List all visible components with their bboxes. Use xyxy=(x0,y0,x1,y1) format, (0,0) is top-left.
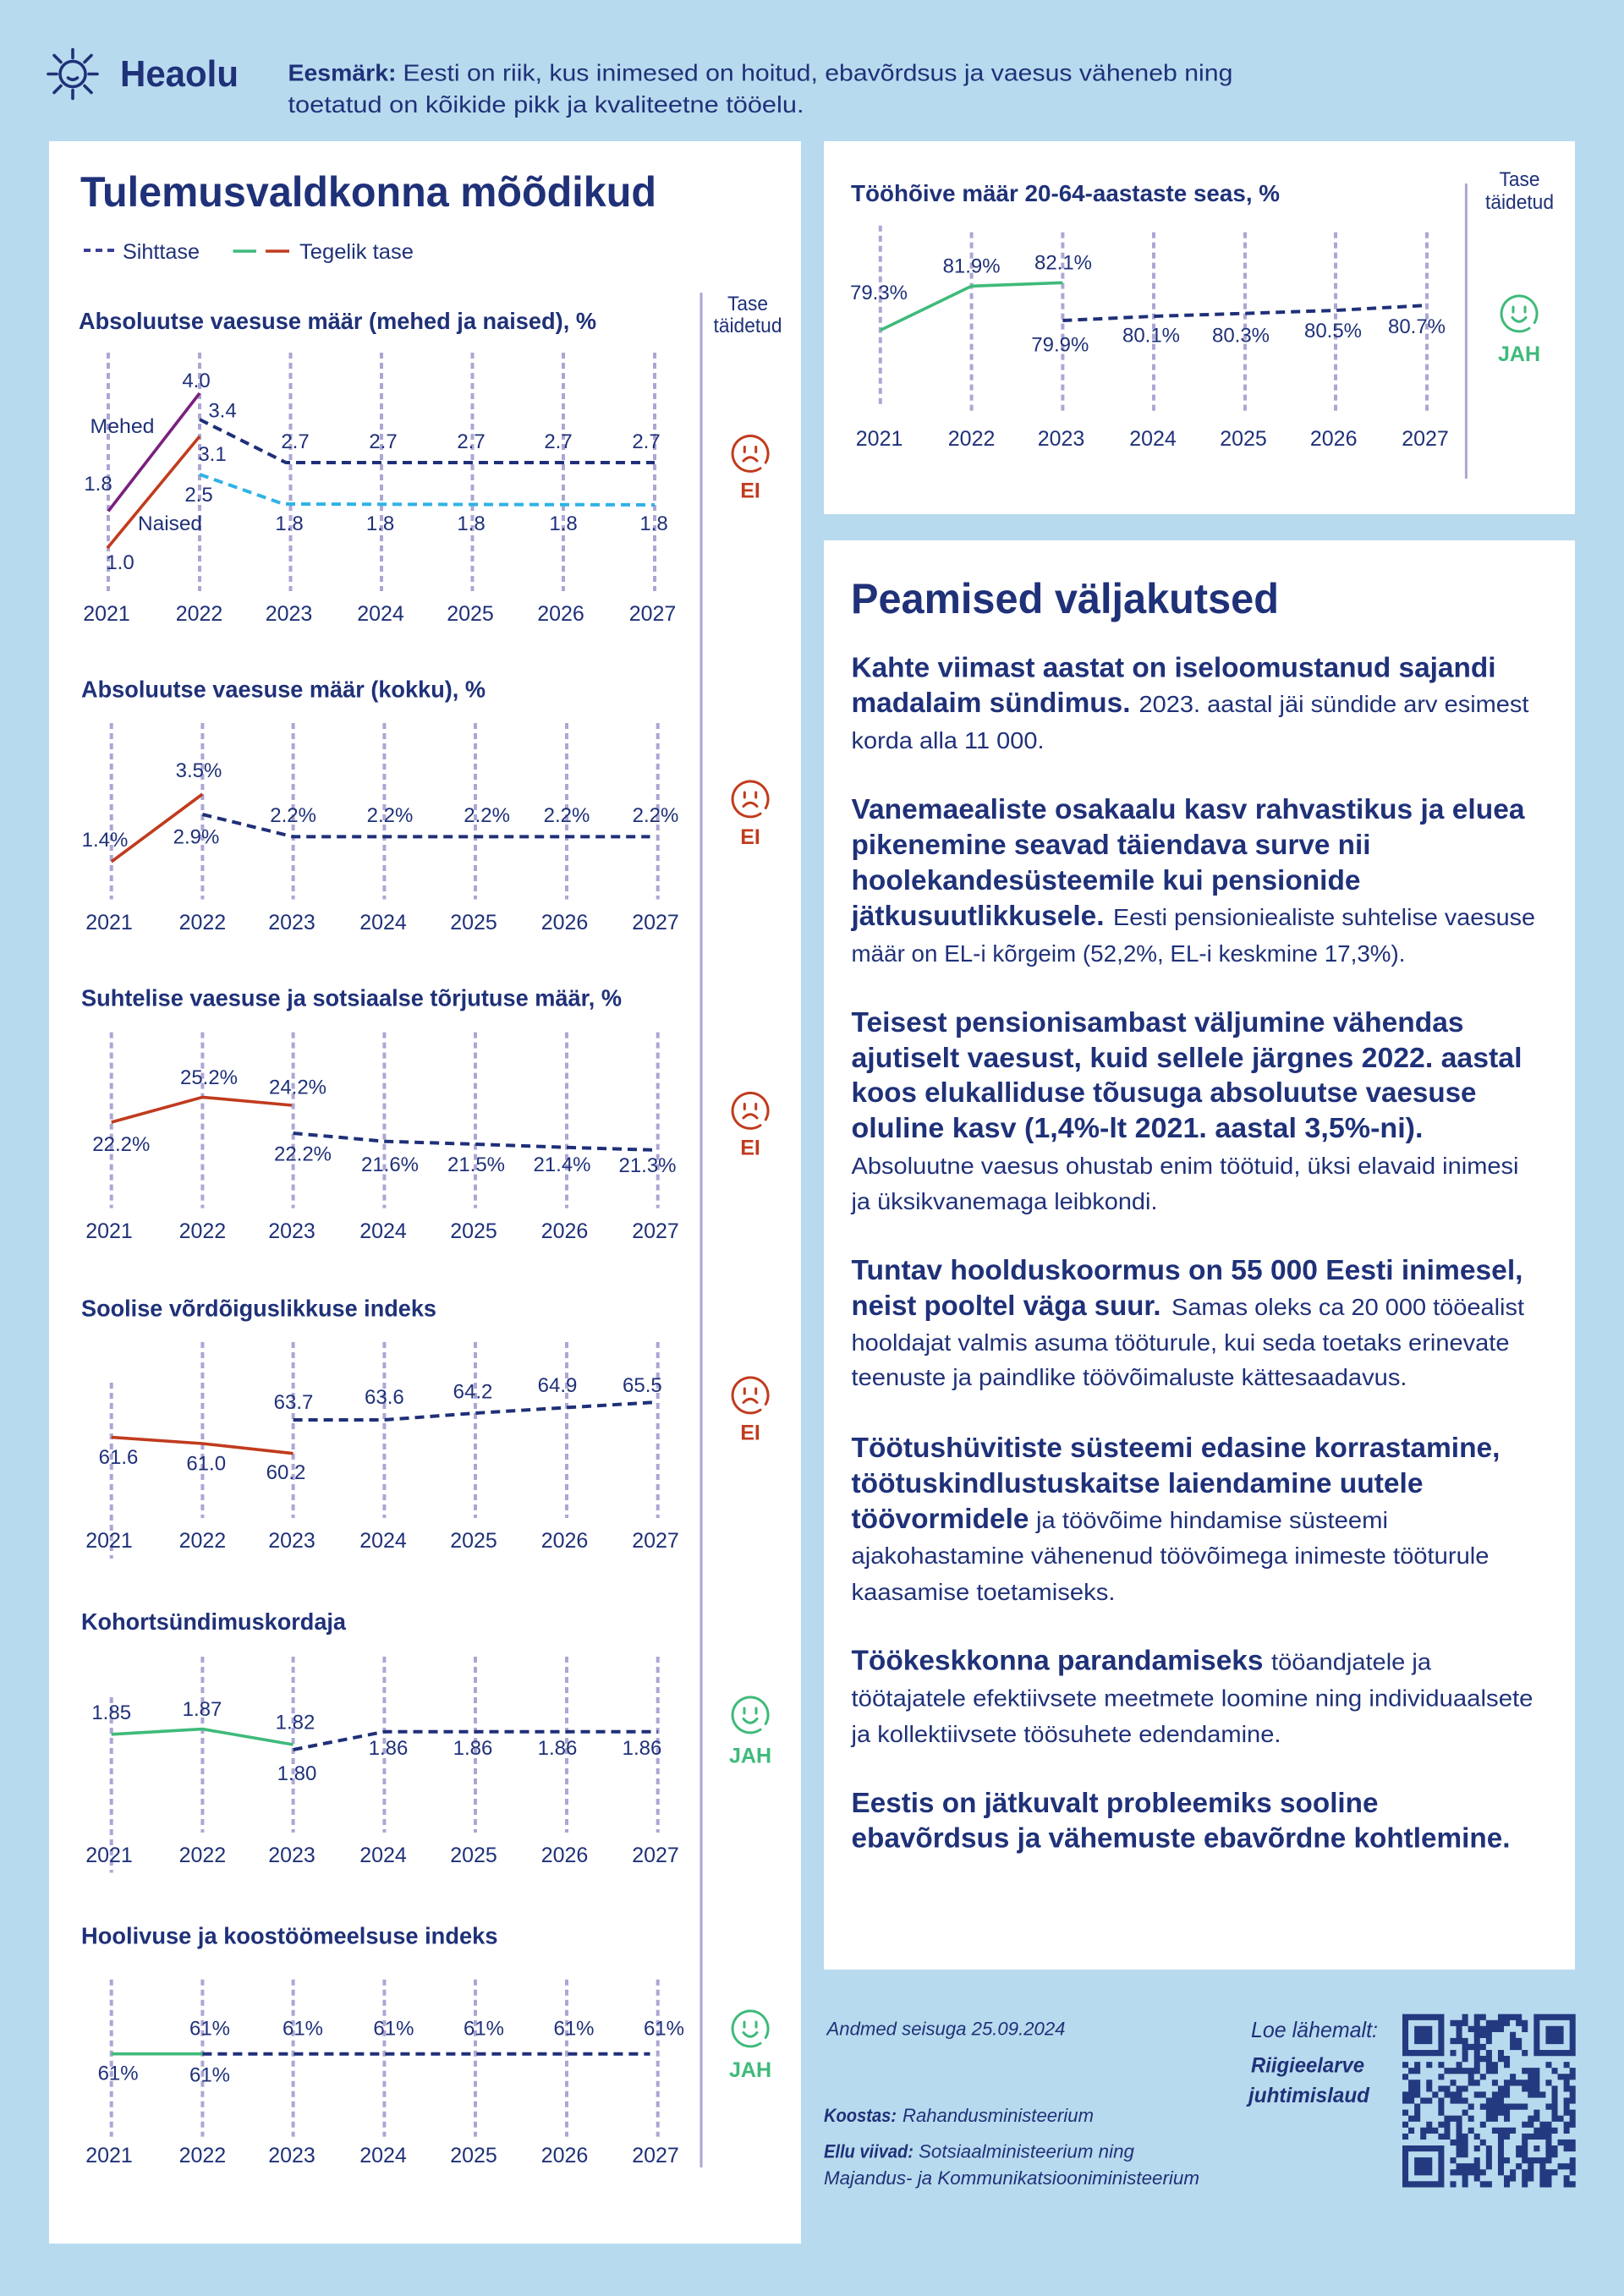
value labels xyxy=(92,1066,677,1177)
text block: care burden: Tuntav hoolduskoormus on 55 000 Eesti inimesel, xyxy=(851,1254,1522,1285)
value labels: 21.3% xyxy=(618,1154,677,1177)
text block: pension pillar: ja üksikvanemaga leibkondi. xyxy=(850,1188,1157,1214)
value labels: 79.9% xyxy=(1031,333,1089,356)
chart title: Absoluutse vaesuse määr (kokku), % xyxy=(81,677,486,703)
line: men actual xyxy=(108,393,200,511)
value labels: 1.4% xyxy=(82,829,128,852)
goal text: Eesmärk: xyxy=(288,59,396,86)
year axis: 2026 xyxy=(541,911,588,934)
year axis: 2021 xyxy=(856,427,903,451)
status column heading: täidetud xyxy=(1485,191,1554,214)
value labels: 61.0 xyxy=(186,1453,226,1476)
year axis: 2021 xyxy=(83,602,130,626)
line: target xyxy=(294,1402,658,1420)
text block: ageing xyxy=(850,793,1535,967)
year axis: 2025 xyxy=(450,1844,497,1867)
text block: birth rate: korda alla 11 000. xyxy=(851,727,1044,753)
chart title: Hoolivuse ja koostöömeelsuse indeks xyxy=(81,1923,497,1949)
year axis: 2026 xyxy=(541,2144,588,2167)
credits xyxy=(824,2105,1199,2189)
text block: work environment: töötajatele efektiivsete meetmete loomine ning individuaalsete xyxy=(851,1685,1533,1712)
year axis: 2027 xyxy=(632,2144,679,2167)
line: target xyxy=(294,1133,658,1150)
value labels: 2.7 xyxy=(632,430,661,453)
status: JAH xyxy=(1498,296,1540,366)
credits: Ellu viivad: xyxy=(824,2141,914,2162)
value labels: 22.2% xyxy=(92,1133,150,1156)
value labels: 2.7 xyxy=(457,430,486,453)
year axis: 2025 xyxy=(1220,427,1267,451)
text block: work environment: Töökeskkonna parandamiseks xyxy=(851,1644,1264,1676)
text block: care burden: hooldajat valmis asuma tööturule, kui seda toetaks erinevate xyxy=(851,1329,1509,1356)
goal text: toetatud on kõikide pikk ja kvaliteetne tööelu. xyxy=(288,91,804,118)
value labels: 61.6 xyxy=(99,1446,138,1469)
year axis: 2023 xyxy=(268,1219,315,1243)
chart title: Soolise võrdõiguslikkuse indeks xyxy=(81,1296,436,1321)
text block: inequality xyxy=(851,1787,1511,1854)
value labels: 61% xyxy=(464,2018,504,2041)
year axis: 2026 xyxy=(541,1529,588,1553)
chart: cohort fertility rate xyxy=(81,1608,771,1872)
goal text: Eesti on riik, kus inimesed on hoitud, ebavõrdsus ja vaesus väheneb ning xyxy=(403,59,1232,86)
text block: ageing: jätkusuutlikkusele. xyxy=(850,900,1105,931)
status: EI xyxy=(732,436,768,502)
text block: pension pillar: oluline kasv (1,4%-lt 2021. aastal 3,5%-ni). xyxy=(851,1112,1423,1143)
value labels: 3.4 xyxy=(208,399,237,423)
line: target xyxy=(1062,305,1427,321)
status: EI xyxy=(732,1378,768,1445)
value labels: 1.82 xyxy=(276,1712,315,1734)
goal text xyxy=(288,59,1232,118)
status: JAH xyxy=(729,2011,771,2082)
value labels: 61% xyxy=(283,2018,323,2041)
year axis: 2024 xyxy=(359,1219,407,1243)
chart title: Kohortsündimuskordaja xyxy=(81,1608,346,1635)
value labels: 2.2% xyxy=(464,804,510,827)
text block: care burden: Samas oleks ca 20 000 tööealist xyxy=(1171,1294,1524,1320)
year axis xyxy=(856,427,1449,451)
chart title: Absoluutse vaesuse määr (mehed ja naised), % xyxy=(79,308,596,334)
text block: pension pillar: koos elukalliduse tõusuga absoluutse vaesuse xyxy=(851,1077,1477,1108)
text block: inequality: ebavõrdsus ja vähemuste ebavõrdne kohtlemine. xyxy=(851,1822,1511,1854)
year axis: 2022 xyxy=(948,427,995,451)
data date: Andmed seisuga 25.09.2024 xyxy=(825,2019,1066,2040)
value labels: 1.86 xyxy=(623,1737,661,1760)
year axis xyxy=(85,911,679,934)
value labels: Mehed xyxy=(90,415,154,438)
value labels: 1.87 xyxy=(183,1698,222,1721)
value labels xyxy=(98,2018,684,2087)
year axis: 2027 xyxy=(1402,427,1449,451)
value labels: 1.85 xyxy=(91,1701,131,1724)
value labels: 61% xyxy=(373,2018,414,2041)
header xyxy=(48,49,1232,118)
legend xyxy=(84,240,414,264)
value labels: 79.3% xyxy=(850,282,908,304)
year axis: 2026 xyxy=(541,1844,588,1867)
value labels: 80.1% xyxy=(1122,325,1180,347)
year axis: 2024 xyxy=(359,2144,407,2167)
value labels: 61% xyxy=(553,2018,595,2041)
line: target xyxy=(294,1732,658,1750)
value labels: 22.2% xyxy=(274,1143,332,1165)
value labels: 1.8 xyxy=(275,512,304,535)
text block: unemployment benefits: ja töövõime hindamise süsteemi xyxy=(1035,1507,1388,1533)
text block: pension pillar: Absoluutne vaesus ohustab enim töötuid, üksi elavaid inimesi xyxy=(851,1153,1519,1179)
year axis: 2024 xyxy=(359,1844,407,1867)
year axis: 2023 xyxy=(268,2144,315,2167)
value labels: 2.2% xyxy=(367,804,413,827)
year axis: 2027 xyxy=(632,1219,679,1243)
year axis: 2023 xyxy=(1038,427,1084,451)
text block: ageing: pikenemine seavad täiendava surve nii xyxy=(851,829,1370,860)
year axis xyxy=(85,1844,679,1867)
status: JAH: JAH xyxy=(729,1744,771,1767)
year axis: 2027 xyxy=(632,1529,679,1553)
value labels: 2.7 xyxy=(369,430,398,453)
text block: pension pillar xyxy=(850,1006,1522,1214)
year axis xyxy=(83,602,676,626)
status: JAH: JAH xyxy=(1498,342,1540,366)
text block: pension pillar: ajutiselt vaesust, kuid sellele järgnes 2022. aastal xyxy=(851,1042,1522,1073)
text block: work environment xyxy=(850,1644,1533,1747)
line: actual xyxy=(112,1097,292,1122)
status: EI: EI xyxy=(740,1422,760,1445)
year axis: 2022 xyxy=(179,1844,226,1867)
status column heading: Tase xyxy=(1499,168,1539,191)
footer xyxy=(824,2017,1576,2189)
status: JAH xyxy=(729,1697,771,1767)
panel: employment rate chart xyxy=(824,141,1575,514)
value labels: 61% xyxy=(644,2018,684,2041)
text block: unemployment benefits: töövormidele xyxy=(851,1503,1029,1534)
text block: unemployment benefits: töötuskindlustuskaitse laiendamine uutele xyxy=(851,1467,1423,1499)
year axis: 2023 xyxy=(268,911,315,934)
text block: unemployment benefits: kaasamise toetamiseks. xyxy=(851,1579,1115,1605)
heading: Peamised väljakutsed: Peamised väljakutsed xyxy=(851,575,1279,622)
text block: ageing: hoolekandesüsteemile kui pensionide xyxy=(851,864,1360,896)
value labels: 3.5% xyxy=(176,759,222,782)
value labels: 4.0 xyxy=(182,370,211,392)
legend: Tegelik tase xyxy=(299,240,414,264)
text block: birth rate xyxy=(851,652,1529,753)
line: actual xyxy=(112,1729,294,1745)
year axis: 2021 xyxy=(85,1844,133,1867)
year axis: 2024 xyxy=(357,602,404,626)
year axis: 2023 xyxy=(266,602,312,626)
value labels: 1.86 xyxy=(538,1737,577,1760)
read more: Riigieelarve xyxy=(1251,2054,1364,2078)
line: actual xyxy=(881,282,1062,330)
value labels xyxy=(84,370,668,574)
value labels: 65.5 xyxy=(623,1374,662,1397)
line: men target xyxy=(200,419,655,463)
chart: care and cooperation index xyxy=(81,1923,771,2167)
QR code xyxy=(1402,2017,1576,2184)
year axis: 2027 xyxy=(632,911,679,934)
year axis: 2025 xyxy=(447,602,494,626)
value labels: 64.9 xyxy=(538,1374,577,1397)
year axis: 2026 xyxy=(1310,427,1358,451)
chart title: Suhtelise vaesuse ja sotsiaalse tõrjutuse määr, % xyxy=(81,984,622,1011)
value labels: 2.7 xyxy=(544,430,573,453)
text block: birth rate: 2023. aastal jäi sündide arv esimest xyxy=(1138,691,1529,717)
text block: birth rate: Kahte viimast aastat on iseloomustanud sajandi xyxy=(851,652,1495,683)
year axis: 2021 xyxy=(85,911,133,934)
year axis: 2021 xyxy=(85,2144,133,2167)
heading: Heaolu: Heaolu xyxy=(120,53,239,95)
value labels: 25.2% xyxy=(180,1066,238,1089)
text block: work environment: ja kollektiivsete töösuhete edendamine. xyxy=(850,1721,1281,1747)
value labels: 24.2% xyxy=(269,1076,326,1099)
line: actual xyxy=(112,794,202,862)
year axis: 2027 xyxy=(632,1844,679,1867)
value labels: 81.9% xyxy=(943,255,1001,277)
status: EI: EI xyxy=(740,825,760,849)
text block: ageing: määr on EL-i kõrgeim (52,2%, EL-i keskmine 17,3%). xyxy=(851,940,1406,967)
value labels: 63.6 xyxy=(365,1386,404,1409)
value labels: 1.8 xyxy=(457,512,486,535)
year axis xyxy=(85,1529,679,1553)
year axis: 2022 xyxy=(179,1219,226,1243)
text block: unemployment benefits: ajakohastamine vähenenud töövõimega inimeste tööturule xyxy=(851,1543,1489,1569)
chart: relative poverty and social exclusion xyxy=(81,984,768,1243)
year axis: 2024 xyxy=(359,1529,407,1553)
value labels xyxy=(82,759,678,852)
status: EI xyxy=(732,781,768,849)
status: EI: EI xyxy=(740,479,760,502)
line: target xyxy=(202,2052,650,2056)
year axis: 2022 xyxy=(179,2144,226,2167)
line: women target xyxy=(200,474,655,505)
text block: care burden xyxy=(851,1254,1524,1390)
value labels: 63.7 xyxy=(274,1391,313,1414)
status column heading: täidetud xyxy=(714,315,782,337)
value labels: 1.8 xyxy=(84,473,112,496)
credits: Sotsiaalministeerium ning xyxy=(919,2141,1135,2162)
year axis: 2024 xyxy=(359,911,407,934)
chart: absolute poverty total xyxy=(81,677,768,934)
value labels: 1.86 xyxy=(453,1737,492,1760)
value labels: 80.3% xyxy=(1212,325,1270,347)
year axis: 2025 xyxy=(450,2144,497,2167)
value labels: 1.0 xyxy=(106,551,134,574)
year axis: 2021 xyxy=(85,1529,133,1553)
credits: Koostas: xyxy=(824,2105,897,2126)
read more: juhtimislaud xyxy=(1246,2084,1370,2107)
year axis: 2022 xyxy=(176,602,222,626)
year axis: 2026 xyxy=(541,1219,588,1243)
chart: absolute poverty men and women xyxy=(79,308,768,626)
year axis: 2022 xyxy=(179,1529,226,1553)
value labels: 3.1 xyxy=(198,443,227,466)
value labels: 1.86 xyxy=(369,1737,408,1760)
year axis: 2025 xyxy=(450,1529,497,1553)
value labels: 2.9% xyxy=(173,825,219,848)
year axis: 2023 xyxy=(268,1529,315,1553)
legend: Sihttase xyxy=(123,240,200,264)
year axis xyxy=(85,2144,679,2167)
status column heading: Tase xyxy=(727,293,768,315)
credits: Rahandusministeerium xyxy=(903,2105,1094,2126)
value labels: 61% xyxy=(98,2062,139,2085)
read more: Loe lähemalt: xyxy=(1251,2017,1378,2042)
value labels: 80.5% xyxy=(1304,320,1362,342)
status column heading xyxy=(714,293,782,337)
value labels: 82.1% xyxy=(1034,251,1092,274)
value labels: 21.4% xyxy=(533,1153,591,1176)
year axis: 2022 xyxy=(179,911,226,934)
value labels: 1.8 xyxy=(639,512,668,535)
chart title: Tööhõive määr 20-64-aastaste seas, % xyxy=(851,180,1280,206)
year axis: 2025 xyxy=(450,1219,497,1243)
value labels: 1.8 xyxy=(549,512,578,535)
text block: unemployment benefits xyxy=(851,1432,1501,1605)
value labels: 1.80 xyxy=(277,1762,316,1785)
value labels: 80.7% xyxy=(1388,315,1446,338)
value labels: Naised xyxy=(138,512,202,535)
value labels: 21.5% xyxy=(447,1153,505,1176)
value labels xyxy=(99,1374,662,1484)
value labels: 60.2 xyxy=(266,1461,305,1484)
text block: birth rate: madalaim sündimus. xyxy=(851,687,1130,718)
year axis: 2024 xyxy=(1129,427,1177,451)
line: actual xyxy=(112,2052,202,2055)
value labels xyxy=(91,1698,661,1785)
credits: Majandus- ja Kommunikatsiooniministeerium xyxy=(824,2167,1199,2189)
text block: ageing: Vanemaealiste osakaalu kasv rahvastikus ja eluea xyxy=(851,793,1525,825)
value labels: 21.6% xyxy=(361,1153,419,1176)
status: EI: EI xyxy=(740,1137,760,1160)
panel: main challenges xyxy=(824,540,1575,1970)
chart: gender equality index xyxy=(81,1296,768,1559)
text block: work environment: tööandjatele ja xyxy=(1271,1649,1431,1674)
status: JAH: JAH xyxy=(729,2058,771,2082)
text block: pension pillar: Teisest pensionisambast väljumine vähendas xyxy=(851,1006,1463,1038)
year axis: 2023 xyxy=(268,1844,315,1867)
text block: unemployment benefits: Töötushüvitiste süsteemi edasine korrastamine, xyxy=(851,1432,1501,1463)
year axis: 2026 xyxy=(537,602,584,626)
status: EI xyxy=(732,1093,768,1160)
text block: care burden: teenuste ja paindlike töövõimaluste kättesaadavus. xyxy=(851,1364,1407,1390)
text block: ageing: Eesti pensioniealiste suhtelise vaesuse xyxy=(1113,904,1535,930)
value labels xyxy=(850,251,1446,356)
panel: outcome measures xyxy=(49,141,801,2244)
value labels: 2.5 xyxy=(184,484,213,507)
text block: inequality: Eestis on jätkuvalt probleemiks sooline xyxy=(851,1787,1379,1818)
year axis: 2027 xyxy=(629,602,676,626)
line: target xyxy=(202,814,650,836)
heading: Tulemusvaldkonna mõõdikud: Tulemusvaldkonna mõõdikud xyxy=(80,168,656,216)
icon: sun xyxy=(48,49,97,98)
status column heading xyxy=(1485,168,1554,214)
line: women actual xyxy=(107,436,200,548)
value labels: 2.7 xyxy=(281,430,310,453)
year axis xyxy=(85,1219,679,1243)
value labels: 64.2 xyxy=(453,1381,492,1404)
value labels: 2.2% xyxy=(633,804,678,827)
year axis: 2021 xyxy=(85,1219,133,1243)
value labels: 61% xyxy=(189,2018,230,2041)
value labels: 2.2% xyxy=(544,804,590,827)
value labels: 1.8 xyxy=(366,512,394,535)
year axis: 2025 xyxy=(450,911,497,934)
line: actual xyxy=(112,1438,294,1454)
value labels: 2.2% xyxy=(270,804,316,827)
read more xyxy=(1246,2017,1378,2107)
value labels: 61% xyxy=(189,2064,230,2087)
text block: care burden: neist pooltel väga suur. xyxy=(851,1290,1160,1321)
